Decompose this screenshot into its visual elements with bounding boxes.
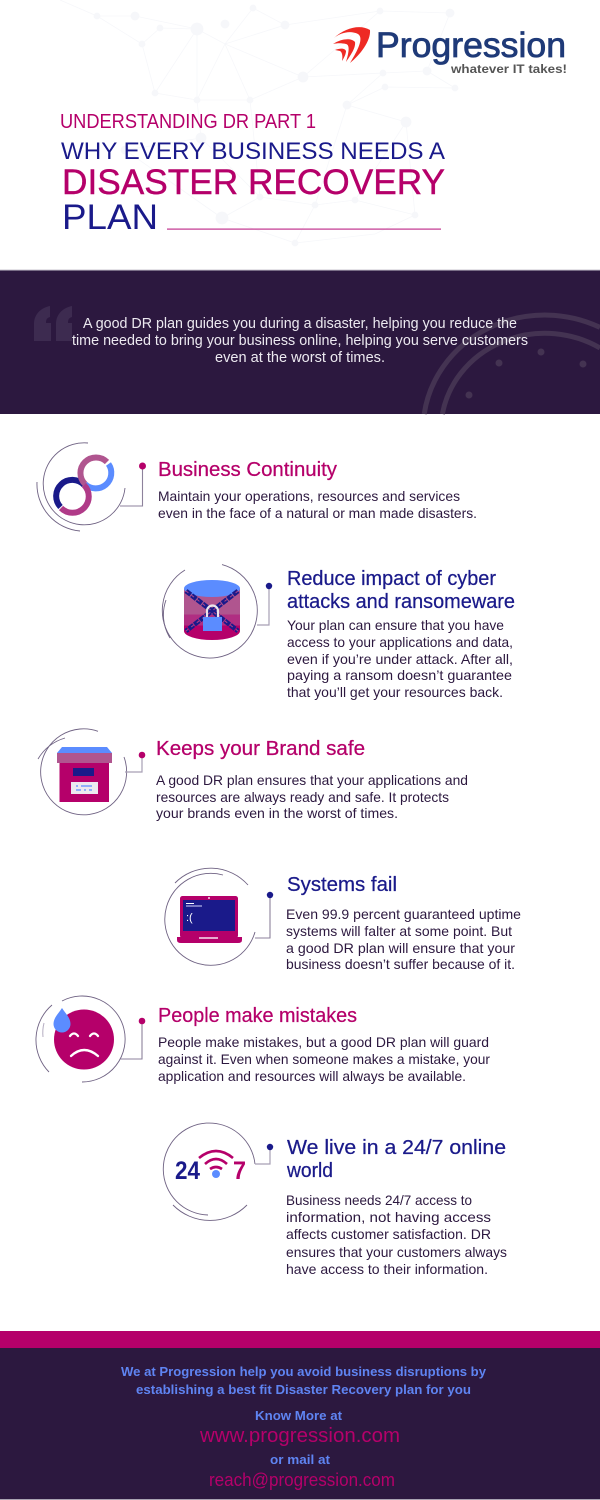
icon: quotation mark bbox=[34, 306, 72, 341]
body text: business doesn’t suffer because of it. bbox=[286, 956, 515, 972]
title bbox=[60, 110, 445, 237]
heading: We live in a 24/7 online bbox=[287, 1137, 506, 1159]
body text: Your plan can ensure that you have bbox=[287, 617, 504, 633]
panel: footer bbox=[0, 1331, 600, 1500]
body text: Even 99.9 percent guaranteed uptime bbox=[286, 906, 521, 922]
heading: attacks and ransomeware bbox=[287, 591, 515, 613]
heading bbox=[287, 568, 515, 613]
body text: People make mistakes, but a good DR plan will guard bbox=[158, 1034, 489, 1050]
quote text bbox=[72, 316, 528, 366]
body text: Business needs 24/7 access to bbox=[286, 1192, 472, 1208]
body text: against it. Even when someone makes a mistake, your bbox=[158, 1051, 490, 1067]
body text: systems will falter at some point. But bbox=[286, 923, 512, 939]
body text: resources are always ready and safe. It protects bbox=[156, 789, 449, 805]
panel: 24/7 online world bbox=[163, 1123, 507, 1277]
body text: A good DR plan ensures that your applications and bbox=[156, 772, 468, 788]
panel: systems fail: Systems fail bbox=[287, 874, 397, 896]
panel: people make mistakes: People make mistakes bbox=[158, 1005, 357, 1027]
body text: information, not having access bbox=[286, 1209, 491, 1225]
panel: business continuity bbox=[37, 443, 477, 531]
body text: even in the face of a natural or man made disasters. bbox=[158, 505, 477, 521]
icon: 24/7 wifi: 7 bbox=[233, 1157, 246, 1185]
body text bbox=[156, 772, 468, 821]
footer message: We at Progression help you avoid business disruptions by bbox=[121, 1364, 487, 1379]
body text: Maintain your operations, resources and services bbox=[158, 488, 460, 504]
title: WHY EVERY BUSINESS NEEDS A bbox=[61, 138, 445, 165]
footer message: Know More at bbox=[255, 1408, 343, 1423]
logo: Progression: Progression bbox=[376, 26, 566, 65]
body text bbox=[158, 1034, 490, 1084]
panel: reduce impact of cyber attacks bbox=[162, 565, 515, 700]
panel: keeps your brand safe bbox=[38, 729, 468, 821]
icon: sad face with sweat drop bbox=[36, 996, 125, 1082]
body text: even if you’re under attack. After all, bbox=[287, 651, 513, 667]
icon: archive box bbox=[38, 729, 127, 815]
icon: 24/7 wifi: 24 bbox=[175, 1157, 200, 1185]
quote text: even at the worst of times. bbox=[215, 350, 385, 366]
icon: red swoosh bbox=[333, 27, 370, 63]
logo: Progression bbox=[333, 26, 567, 76]
panel: quote band bbox=[0, 270, 600, 414]
body text: a good DR plan will ensure that your bbox=[286, 940, 515, 956]
decorative rings and dots bbox=[424, 315, 600, 414]
icon: laptop with error screen bbox=[165, 868, 255, 965]
body text: ensures that your customers always bbox=[286, 1244, 507, 1260]
icon: linked rings bbox=[37, 443, 125, 531]
icon: locked database bbox=[162, 565, 257, 658]
body text: affects customer satisfaction. DR bbox=[286, 1226, 491, 1242]
footer contacts: www.progression.com bbox=[199, 1425, 400, 1447]
footer contacts: reach@progression.com bbox=[209, 1470, 395, 1490]
icon: laptop with error screen: :( bbox=[186, 912, 193, 924]
footer message bbox=[121, 1364, 487, 1467]
body text: access to your applications and data, bbox=[287, 634, 513, 650]
footer message: or mail at bbox=[270, 1452, 331, 1467]
panel: people make mistakes bbox=[36, 996, 490, 1084]
footer message: establishing a best fit Disaster Recovery plan for you bbox=[136, 1382, 471, 1397]
quote text: time needed to bring your business online, helping you serve customers bbox=[72, 333, 528, 349]
body text bbox=[287, 617, 513, 700]
footer contacts bbox=[199, 1425, 400, 1490]
body text: have access to their information. bbox=[286, 1261, 488, 1277]
body text bbox=[286, 906, 521, 972]
body text: your brands even in the worst of times. bbox=[156, 805, 398, 821]
heading: Reduce impact of cyber bbox=[287, 568, 496, 590]
icon: 24/7 wifi bbox=[163, 1123, 255, 1220]
heading bbox=[286, 1137, 506, 1182]
body text: that you’ll get your resources back. bbox=[287, 684, 503, 700]
body text: paying a ransom doesn’t guarantee bbox=[287, 667, 512, 683]
body text bbox=[158, 488, 477, 521]
panel: systems fail bbox=[165, 868, 521, 972]
body text: application and resources will always be available. bbox=[158, 1068, 466, 1084]
title: UNDERSTANDING DR PART 1 bbox=[60, 110, 316, 133]
panel: keeps your brand safe: Keeps your Brand safe bbox=[156, 738, 365, 760]
heading: world bbox=[286, 1160, 333, 1182]
body text bbox=[286, 1192, 507, 1277]
quote text: A good DR plan guides you during a disaster, helping you reduce the bbox=[83, 316, 517, 332]
title: DISASTER RECOVERY bbox=[62, 163, 445, 202]
title: PLAN bbox=[62, 198, 158, 237]
logo: Progression: whatever IT takes! bbox=[450, 62, 567, 76]
panel: business continuity: Business Continuity bbox=[158, 459, 337, 481]
